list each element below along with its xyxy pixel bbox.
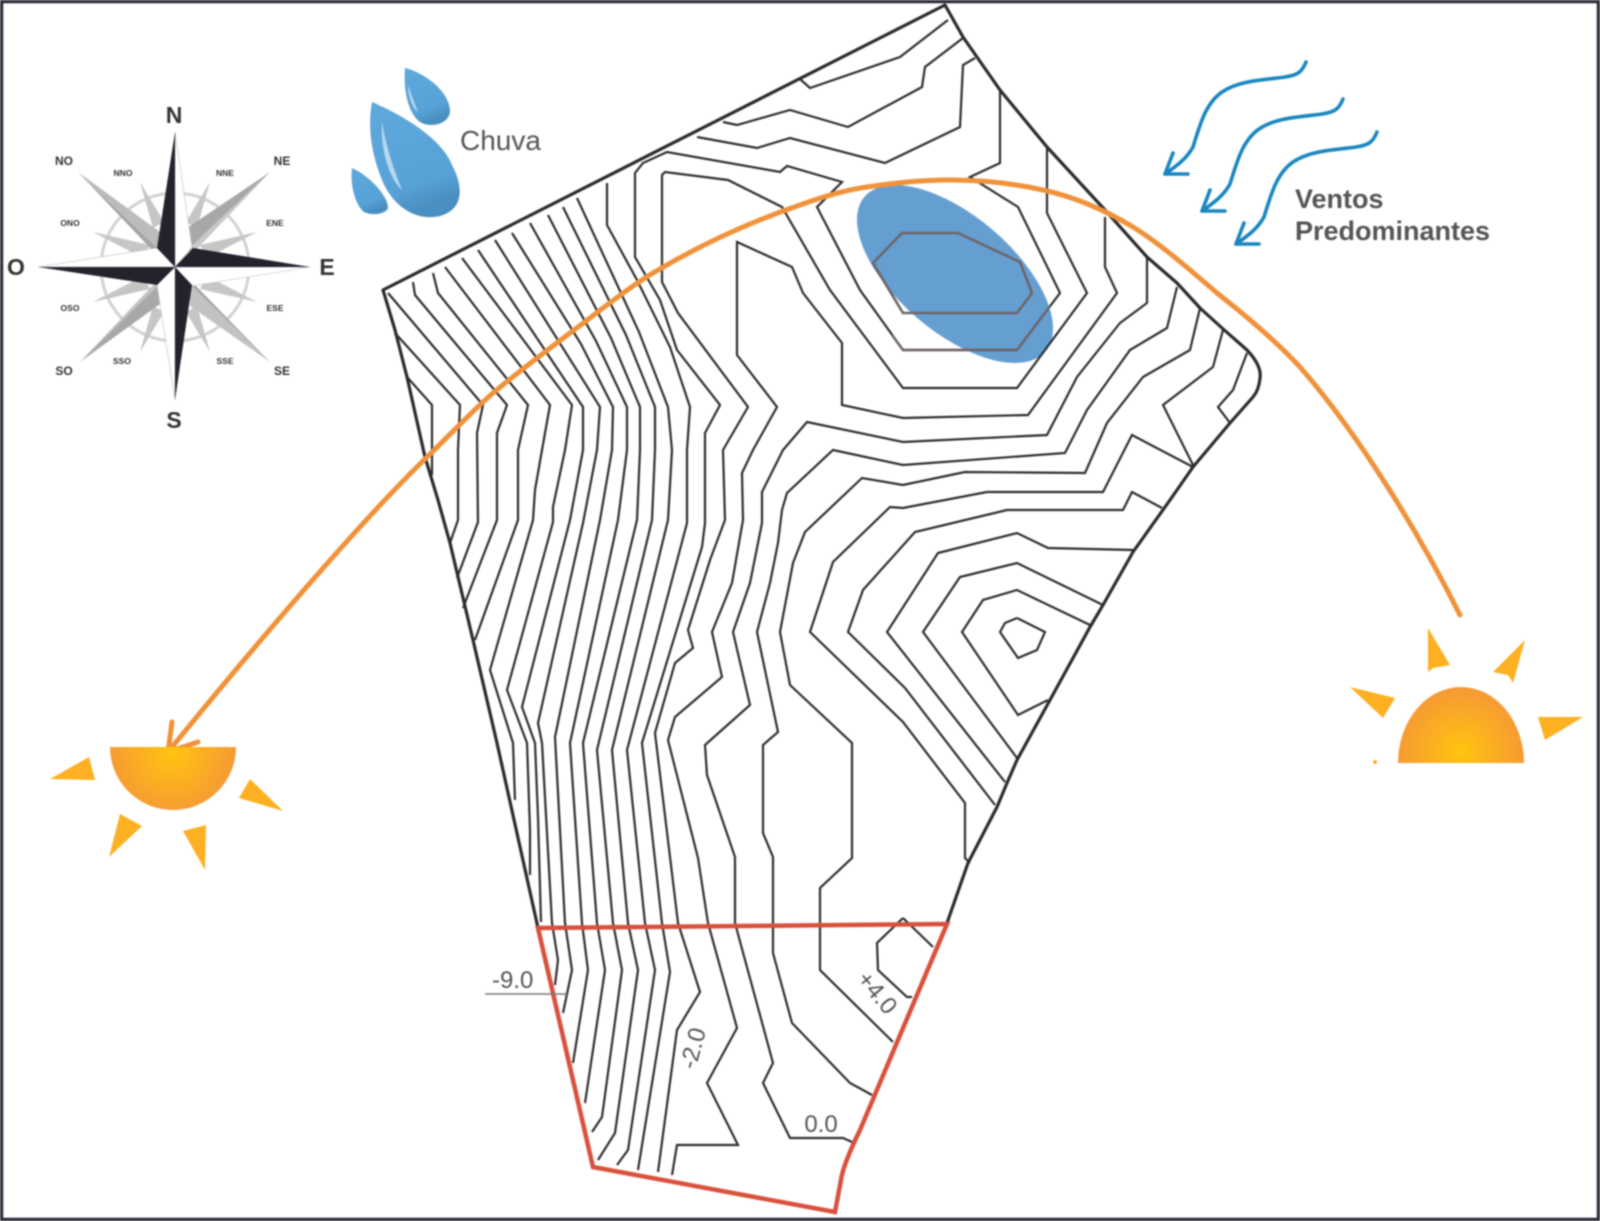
icon: compass rose: N bbox=[166, 102, 182, 128]
label: Ventos Predominantes: Ventos bbox=[1295, 184, 1384, 214]
icon: compass rose: O bbox=[7, 254, 25, 280]
sun path arc with arrow bbox=[168, 180, 1460, 752]
icon: compass rose: NE bbox=[274, 154, 290, 168]
icon: compass rose: NNO bbox=[114, 168, 133, 178]
icon: compass rose: ENE bbox=[266, 218, 284, 228]
icon: rising sun on the right bbox=[1350, 628, 1583, 764]
icon: compass rose: ESE bbox=[266, 303, 284, 313]
innermost contour over the water area bbox=[873, 233, 1032, 313]
elevation label +4.0: +4.0 bbox=[851, 966, 902, 1020]
terrain outline bbox=[383, 5, 1260, 928]
icon: compass rose: E bbox=[319, 254, 335, 280]
label: Chuva: Chuva bbox=[460, 125, 541, 156]
icon: compass rose: SE bbox=[274, 364, 290, 378]
elevation label 0.0: 0.0 bbox=[804, 1111, 838, 1138]
icon: compass rose: SO bbox=[55, 364, 73, 378]
icon: compass rose: NNE bbox=[216, 168, 234, 178]
icon: compass rose: SSO bbox=[113, 356, 131, 366]
icon: compass rose: NO bbox=[55, 154, 73, 168]
icon: compass rose: SSE bbox=[216, 356, 234, 366]
elevation label -2.0: -2.0 bbox=[675, 1025, 712, 1072]
icon: setting sun on the left bbox=[50, 747, 283, 870]
icon: compass rose: S bbox=[166, 407, 182, 433]
blue water area bbox=[827, 153, 1083, 395]
icon: rain drops bbox=[352, 68, 460, 217]
contour over the water area bbox=[892, 306, 1050, 350]
elevation label -9.0: -9.0 bbox=[492, 967, 533, 994]
icon: compass rose: OSO bbox=[61, 303, 80, 313]
icon: compass rose: ONO bbox=[60, 218, 80, 228]
elevation label -9.0 bbox=[485, 967, 567, 994]
topographic contour lines bbox=[388, 20, 1247, 1175]
icon: compass rose bbox=[7, 102, 335, 433]
label: Ventos Predominantes: Predominantes bbox=[1295, 216, 1490, 246]
red highlighted section bbox=[538, 924, 947, 1212]
icon: wind arrows bbox=[1165, 62, 1377, 244]
